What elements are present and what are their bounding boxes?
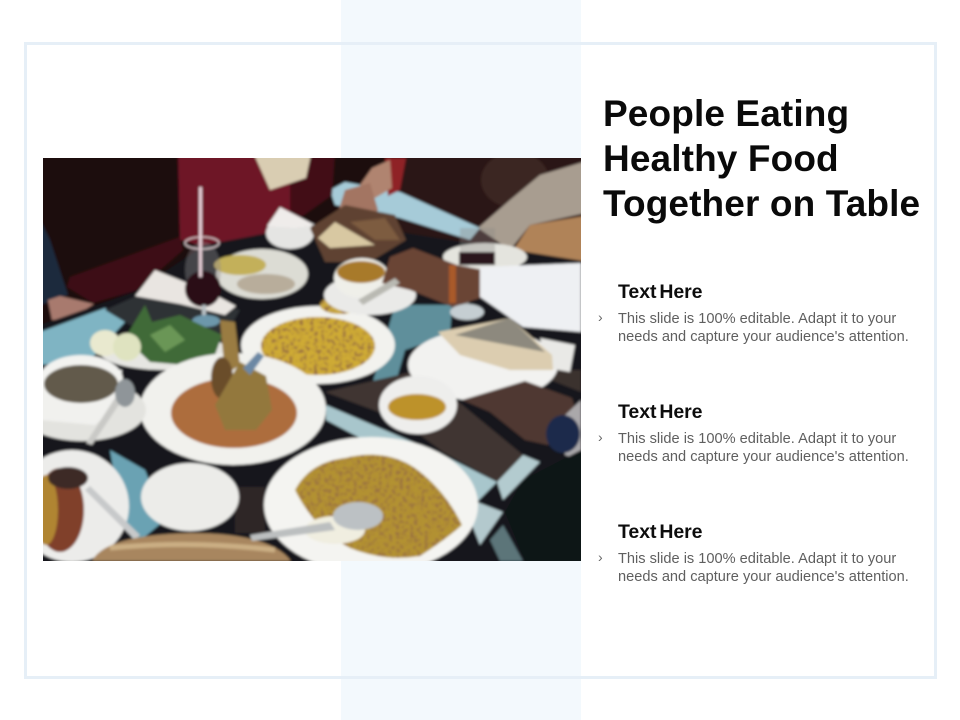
text item 3 [598,521,909,585]
lower placemat highlight and small bowl [379,376,457,434]
item 1 chevron: › [598,309,603,325]
bread basket [310,205,406,262]
rice plate bottom [264,437,478,573]
rice plate [241,306,395,384]
item 2 body [618,431,909,465]
item 2 body: This slide is 100% editable. Adapt it to your [618,431,896,447]
title: Together on Table [603,183,920,224]
item 2 chevron: › [598,429,603,445]
title: Healthy Food [603,138,839,179]
item 1 body: needs and capture your audience's attention. [618,329,909,345]
item 1 body: This slide is 100% editable. Adapt it to your [618,311,896,327]
plate with bread [216,249,308,299]
item 2 body: needs and capture your audience's attention. [618,449,909,465]
lower hand and watch [462,381,578,445]
salad plate [100,334,230,370]
photo: people eating food at a table [43,158,581,561]
title [603,93,920,224]
text item 1 [598,281,909,345]
soup cup and saucer [324,275,416,315]
white bowl [266,217,314,249]
hand holding spoon [382,248,483,307]
plate bottom left [15,450,129,562]
plate behind right glass [443,243,527,271]
title: People Eating [603,93,849,134]
item 1 heading: Text Here [618,281,702,303]
woven basket [92,533,291,561]
item 3 chevron: › [598,549,603,565]
item 3 body: needs and capture your audience's attention. [618,569,909,585]
item 3 heading: Text Here [618,521,702,543]
item 1 body [618,311,909,345]
text item 2 [598,401,909,465]
lamb curry plate [140,353,326,465]
background vertical band [341,0,581,720]
dark corner [505,450,581,561]
wine glass [185,242,221,298]
item 3 body: This slide is 100% editable. Adapt it to your [618,551,896,567]
item 2 heading: Text Here [618,401,702,423]
empty bowl [141,463,239,531]
plate with flatbread [408,329,558,401]
soup cup left [18,379,146,441]
item 3 body [618,551,909,585]
